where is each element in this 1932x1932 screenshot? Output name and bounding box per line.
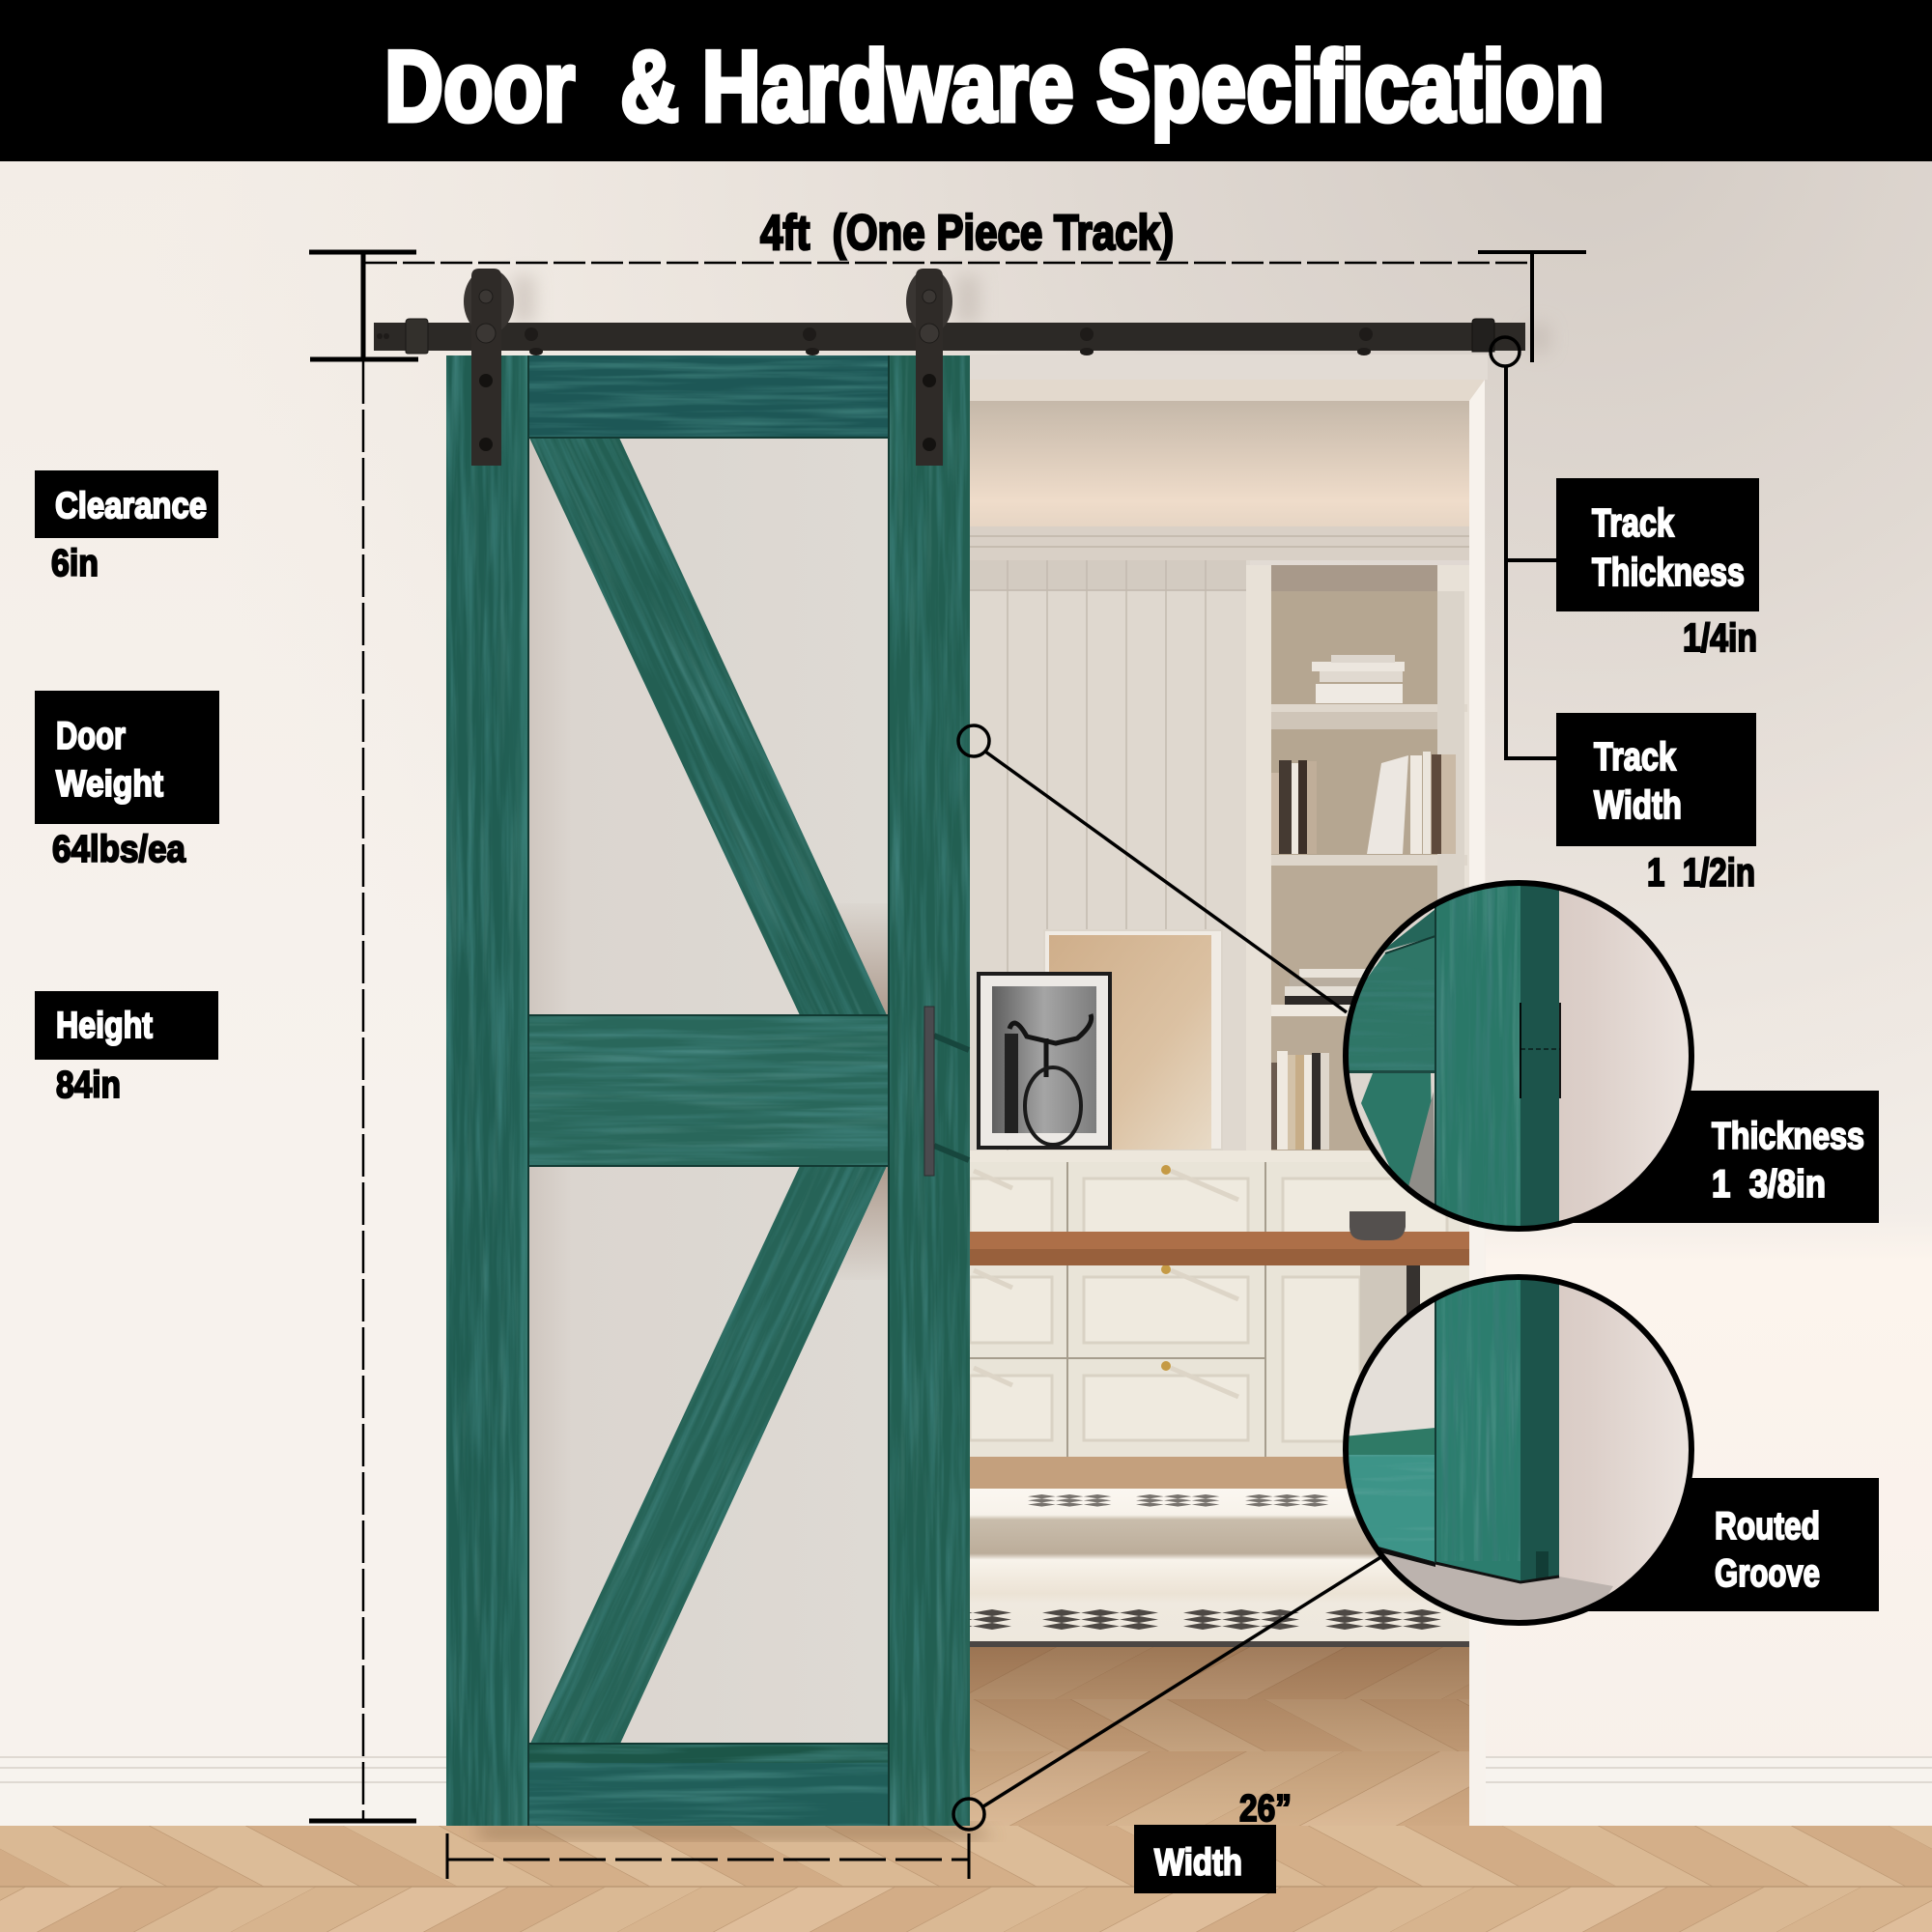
- label: width: 26”: [1239, 1788, 1292, 1830]
- door pull handle: [924, 1007, 969, 1176]
- track length label: 4ft (One Piece Track): [760, 205, 1174, 260]
- label: track width: Width: [1594, 782, 1682, 827]
- bottom rail: [528, 1744, 889, 1826]
- track length dimension: [309, 205, 1586, 362]
- diagonal brace upper: [529, 439, 887, 1014]
- left stile: [446, 355, 528, 1826]
- label: thickness: [1565, 1091, 1879, 1223]
- label: track width: [1556, 713, 1756, 895]
- label: width: [1134, 1788, 1292, 1893]
- bookcase: [1246, 565, 1469, 1164]
- patterned rug: [970, 1494, 1469, 1647]
- width dimension: [447, 1833, 969, 1879]
- track callout leader: [1491, 337, 1556, 758]
- label: height: 84in: [56, 1065, 121, 1106]
- label: door weight: Weight: [56, 764, 163, 805]
- wooden desk: [970, 1211, 1469, 1352]
- thickness tick marks: [1520, 1003, 1560, 1098]
- room seen through doorway: [970, 380, 1486, 1826]
- label: track thickness: [1556, 478, 1759, 660]
- leaning art frame: [1044, 930, 1222, 1150]
- label: door weight: [35, 691, 219, 870]
- label: width: Width: [1154, 1842, 1242, 1884]
- hanger left: [464, 269, 514, 466]
- detail circle: routed groove: [1339, 1275, 1695, 1633]
- label: track width: Track: [1594, 734, 1676, 779]
- label: routed groove: [1565, 1478, 1879, 1611]
- label: clearance: 6in: [51, 543, 99, 584]
- left stopper: [406, 319, 428, 354]
- door opening frame: [970, 380, 1486, 1826]
- label: track width: 1 1/2in: [1647, 850, 1755, 895]
- base cabinets: [970, 1151, 1469, 1457]
- framed bicycle photo: [977, 972, 1112, 1150]
- title banner: [0, 0, 1932, 161]
- middle rail: [528, 1015, 889, 1166]
- label: door weight: 64lbs/ea: [52, 829, 185, 870]
- sliding barn door: [446, 355, 995, 1837]
- shiplap wall: [970, 560, 1250, 1179]
- label: thickness: Thickness: [1712, 1116, 1864, 1157]
- title text: Door & Hardware Specification: [384, 31, 1605, 143]
- label: track thickness: 1/4in: [1683, 615, 1757, 660]
- barn door track: [374, 319, 1525, 355]
- baseboards: [0, 1756, 1932, 1826]
- label: routed groove: Groove: [1715, 1552, 1820, 1595]
- label: track thickness: Thickness: [1592, 550, 1745, 594]
- label: thickness: 1 3/8in: [1712, 1163, 1826, 1206]
- floor: [0, 1826, 1932, 1932]
- books: [1271, 655, 1456, 1150]
- label: track thickness: Track: [1592, 500, 1674, 545]
- thickness callout leader: [958, 725, 1347, 1012]
- right stile: [889, 355, 970, 1826]
- groove callout leader: [953, 1556, 1382, 1830]
- label: door weight: Door: [56, 715, 126, 757]
- wood grain: [446, 355, 970, 1826]
- top rail: [528, 355, 889, 438]
- height dimension: [309, 361, 416, 1821]
- right stopper: [1472, 319, 1494, 352]
- label: height: [35, 991, 218, 1106]
- floor in room: [970, 1457, 1469, 1826]
- detail circle: door thickness: [1338, 879, 1695, 1233]
- label: height: Height: [56, 1006, 153, 1046]
- track bolts: [377, 327, 1373, 355]
- ceiling and crown moulding: [970, 401, 1469, 560]
- door glass panel: [528, 438, 889, 1744]
- label: clearance: Clearance: [55, 486, 207, 526]
- hanger shadows: [512, 275, 1549, 353]
- label: routed groove: Routed: [1715, 1505, 1820, 1548]
- hanger right: [906, 269, 952, 466]
- diagonal brace lower: [531, 1167, 887, 1743]
- label: clearance: [35, 470, 218, 584]
